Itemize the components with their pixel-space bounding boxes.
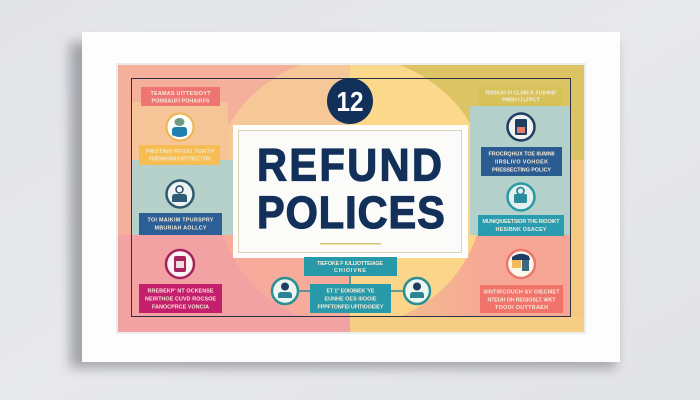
label xyxy=(310,284,391,313)
label xyxy=(480,285,563,313)
label: CHIOIVNE xyxy=(334,268,366,274)
left item 3 xyxy=(139,250,222,313)
title: POLICES xyxy=(257,188,445,238)
icon: person left xyxy=(272,278,298,304)
label: FROCRQHUX TOE IIUMNII xyxy=(488,152,555,158)
right item 1 xyxy=(479,87,563,176)
label: EUNHE OES IIIOOIE xyxy=(324,296,377,302)
right gold field xyxy=(400,65,584,160)
right column teal band xyxy=(470,106,571,235)
label: NEIRTHOE CUVD ROCSOE xyxy=(145,296,216,302)
label xyxy=(139,145,220,165)
mat inner edge xyxy=(116,63,586,334)
bottom centre group xyxy=(272,257,430,313)
card inner border xyxy=(238,130,462,252)
label xyxy=(139,284,222,313)
title xyxy=(257,141,445,238)
bottom left strip xyxy=(304,317,350,326)
label: FPPFTONFEI UFITIOOEIEY xyxy=(318,304,384,310)
title panel xyxy=(233,125,468,258)
label: TOOOI OUTTRAEH xyxy=(495,305,548,311)
number badge xyxy=(327,78,373,124)
picture frame xyxy=(70,32,620,368)
frame shadow xyxy=(70,42,616,368)
connector lines xyxy=(298,276,403,291)
label: NTEUH OH REGIOSLT. WKT xyxy=(488,298,556,304)
left item 1 xyxy=(139,87,220,165)
label xyxy=(141,87,220,106)
label: FRESKHNIUOPTTIECTTIK xyxy=(149,156,211,162)
white card xyxy=(233,125,468,258)
label xyxy=(481,147,562,176)
lower right outer strip xyxy=(571,160,584,316)
right item 2 xyxy=(478,184,564,236)
central circle upper xyxy=(228,65,470,235)
poster artwork background xyxy=(118,56,584,338)
icon: person right xyxy=(404,278,430,304)
icon: person xyxy=(166,114,194,140)
lower left pink field xyxy=(118,235,298,316)
label: TIEFOKE F IULIJOTTEIAGE xyxy=(317,261,383,267)
bottom right strip xyxy=(350,316,584,332)
central circle lower xyxy=(224,235,477,316)
label: POMSAUFI POHAIRFS xyxy=(152,98,210,104)
left item 2 xyxy=(139,180,222,235)
label: MUNIQIUEETSIOR THE RIOOIKT xyxy=(482,219,560,225)
left column peach band xyxy=(131,102,228,160)
right lower salmon field xyxy=(400,235,571,316)
label: PRESSECTING POLICY xyxy=(492,168,551,174)
icon: bag xyxy=(508,114,534,140)
label: MBURIAH AOLLCY xyxy=(154,226,207,232)
label: IIRSLIVO VOHOEK xyxy=(495,160,548,166)
label: ET 1" EOIOBIEK 'YE xyxy=(326,288,375,294)
left salmon field xyxy=(118,65,300,235)
label: PRRH I I LFPCT xyxy=(502,98,541,104)
label xyxy=(478,215,564,236)
label: SINTIRCOUCH SV OIECMET xyxy=(484,290,560,296)
icon: receipt xyxy=(166,250,194,278)
icon: lock xyxy=(508,184,534,210)
label xyxy=(304,257,397,276)
white frame xyxy=(82,32,620,362)
label: HESIBNK OSACEY xyxy=(496,227,547,233)
thin inner outline xyxy=(132,78,570,316)
label: PROTINH RFIUG TURTH xyxy=(146,149,214,155)
label: FANOCPRCE VONCIA xyxy=(152,304,209,310)
label: TEAMAS UITTESIOYT xyxy=(150,91,211,97)
number badge: 12 xyxy=(336,86,364,117)
gold underline xyxy=(320,243,381,244)
icon: documents xyxy=(507,250,535,278)
label: TOI MAIKIM TPURSPRY xyxy=(148,218,214,224)
label xyxy=(139,213,222,235)
label xyxy=(479,87,563,106)
label: RRSIUH FI CLMR K FUIHINF xyxy=(486,90,557,96)
left column teal band xyxy=(131,160,235,235)
label: RREBEKP' NT OCKENSE xyxy=(148,288,214,294)
right item 3 xyxy=(480,250,563,313)
icon: person in teal ring xyxy=(166,180,194,208)
title: REFUND xyxy=(257,141,442,191)
